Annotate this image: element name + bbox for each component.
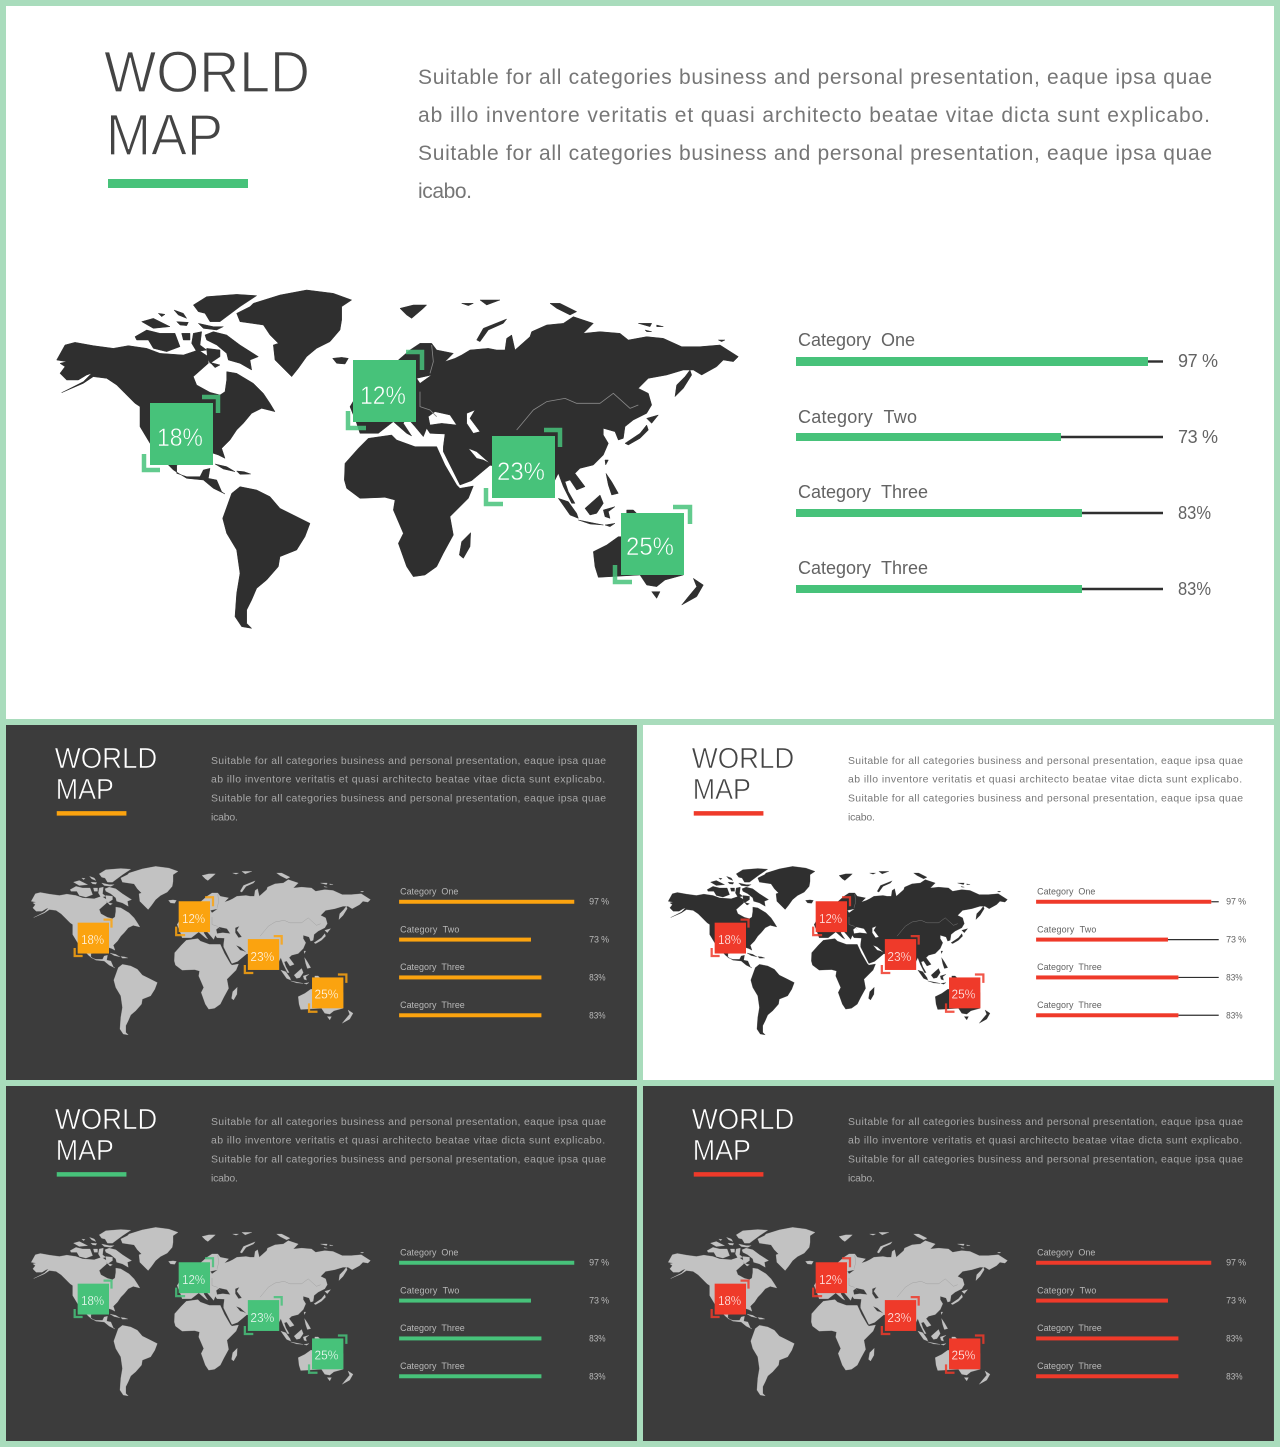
text block: ab illo inventore veritatis et quasi architecto beatae vitae dicta sunt explicabo.: [848, 775, 1242, 786]
world map: [31, 1222, 370, 1396]
category two bar: 73 %: [589, 935, 609, 945]
marker 23%: 23%: [887, 950, 911, 964]
category two bar: Category Two: [1037, 1286, 1096, 1296]
category two bar: [1036, 925, 1246, 945]
category two bar: 73 %: [1226, 935, 1246, 945]
text block: Suitable for all categories business and personal presentation, eaque ipsa quae: [211, 756, 606, 767]
category three bar second: Category Three: [1037, 1000, 1102, 1010]
category three bar second: 83%: [1226, 1010, 1243, 1020]
title underline: [108, 179, 248, 188]
category three bar second: [399, 1000, 606, 1020]
category two bar: Category Two: [400, 925, 459, 935]
text block: Suitable for all categories business and personal presentation, eaque ipsa quae: [848, 1117, 1243, 1128]
marker 18%: 18%: [718, 1294, 741, 1308]
text block: [211, 756, 606, 824]
text block: ab illo inventore veritatis et quasi architecto beatae vitae dicta sunt explicabo.: [418, 104, 1210, 127]
marker 12%: [813, 897, 850, 935]
category three bar second: [399, 1361, 606, 1381]
marker 18%: 18%: [81, 933, 104, 947]
text block: ab illo inventore veritatis et quasi architecto beatae vitae dicta sunt explicabo.: [211, 1136, 605, 1147]
marker 12%: 12%: [182, 912, 205, 926]
marker 18%: 18%: [81, 1294, 104, 1308]
marker 25%: 25%: [952, 1348, 975, 1362]
marker 23%: [245, 936, 282, 973]
category one bar: Category One: [400, 1247, 458, 1257]
text block: Suitable for all categories business and personal presentation, eaque ipsa quae: [848, 1155, 1243, 1166]
category two bar: 73 %: [589, 1296, 609, 1306]
category three bar: Category Three: [1037, 1323, 1102, 1333]
marker 12%: [176, 897, 213, 935]
title: WORLD: [104, 40, 310, 105]
marker 18%: 18%: [157, 424, 203, 452]
category three bar second: Category Three: [400, 1361, 465, 1371]
marker 12%: [813, 1258, 850, 1296]
category one bar: [796, 330, 1218, 371]
text block: ab illo inventore veritatis et quasi architecto beatae vitae dicta sunt explicabo.: [848, 1136, 1242, 1147]
category one bar: 97 %: [589, 1258, 609, 1268]
marker 25%: 25%: [315, 1348, 338, 1362]
title: [55, 743, 157, 806]
category three bar second: 83%: [1178, 579, 1211, 599]
category one bar: Category One: [1037, 1247, 1095, 1257]
text block: [211, 1117, 606, 1185]
title underline: [694, 1172, 763, 1177]
category three bar second: [1036, 1361, 1243, 1381]
marker 23%: [882, 936, 919, 973]
category three bar: Category Three: [798, 482, 928, 502]
text block: icabo.: [848, 1174, 875, 1185]
text block: Suitable for all categories business and personal presentation, eaque ipsa quae: [211, 1155, 606, 1166]
text block: ab illo inventore veritatis et quasi architecto beatae vitae dicta sunt explicabo.: [211, 775, 605, 786]
title underline: [57, 811, 126, 816]
marker 18%: [75, 920, 111, 956]
category three bar: [1036, 962, 1243, 982]
title: WORLD: [55, 1104, 157, 1136]
category three bar: [1036, 1323, 1243, 1343]
category one bar: Category One: [1037, 886, 1095, 896]
marker 25%: [309, 974, 346, 1012]
category three bar second: 83%: [589, 1010, 606, 1020]
category one bar: [1036, 886, 1246, 907]
category three bar: 83%: [589, 1333, 606, 1343]
category three bar: Category Three: [1037, 962, 1102, 972]
category one bar: 97 %: [1178, 351, 1218, 371]
category two bar: [399, 1286, 609, 1306]
panel: dark orange slide: [6, 725, 637, 1080]
marker 23%: 23%: [250, 950, 274, 964]
title: MAP: [56, 1135, 114, 1167]
text block: Suitable for all categories business and personal presentation, eaque ipsa quae: [211, 1117, 606, 1128]
category one bar: [399, 1247, 609, 1268]
marker 18%: [144, 397, 218, 470]
text block: [848, 1117, 1243, 1185]
marker 12%: [176, 1258, 213, 1296]
text block: icabo.: [848, 813, 875, 824]
text block: Suitable for all categories business and personal presentation, eaque ipsa quae: [848, 756, 1243, 767]
marker 12%: [348, 352, 422, 428]
marker 25%: 25%: [952, 987, 975, 1001]
category three bar: 83%: [1226, 1333, 1243, 1343]
marker 12%: 12%: [360, 382, 406, 410]
text block: Suitable for all categories business and personal presentation, eaque ipsa quae: [418, 66, 1212, 89]
title: [55, 1104, 157, 1167]
category three bar second: [1036, 1000, 1243, 1020]
category two bar: Category Two: [798, 407, 917, 427]
category three bar: 83%: [1226, 972, 1243, 982]
marker 12%: 12%: [819, 1273, 842, 1287]
marker 18%: [712, 1281, 748, 1317]
category three bar second: 83%: [589, 1371, 606, 1381]
category three bar second: [796, 558, 1211, 599]
category one bar: [399, 886, 609, 907]
category three bar: [399, 1323, 606, 1343]
category three bar: 83%: [1178, 503, 1211, 523]
title: MAP: [56, 774, 114, 806]
marker 18%: [75, 1281, 111, 1317]
marker 23%: [245, 1297, 282, 1334]
marker 25%: 25%: [315, 987, 338, 1001]
marker 25%: [946, 1335, 983, 1373]
panel: white red slide: [643, 725, 1274, 1080]
title: [104, 40, 310, 168]
panel: dark green slide: [6, 1086, 637, 1441]
category three bar: Category Three: [400, 1323, 465, 1333]
category three bar: Category Three: [400, 962, 465, 972]
title underline: [694, 811, 763, 816]
marker 25%: [946, 974, 983, 1012]
marker 25%: [309, 1335, 346, 1373]
category two bar: Category Two: [1037, 925, 1096, 935]
title: [692, 743, 794, 806]
marker 18%: 18%: [718, 933, 741, 947]
title: WORLD: [55, 743, 157, 775]
title underline: [57, 1172, 126, 1177]
text block: [848, 756, 1243, 824]
category three bar second: Category Three: [1037, 1361, 1102, 1371]
category three bar: 83%: [589, 972, 606, 982]
text block: [418, 66, 1212, 203]
marker 23%: 23%: [250, 1311, 274, 1325]
category one bar: 97 %: [589, 897, 609, 907]
text block: icabo.: [211, 813, 238, 824]
text block: icabo.: [418, 180, 472, 203]
category one bar: [1036, 1247, 1246, 1268]
marker 18%: [712, 920, 748, 956]
marker 23%: 23%: [497, 458, 545, 486]
category three bar second: Category Three: [400, 1000, 465, 1010]
title: MAP: [693, 774, 751, 806]
world map: [57, 280, 738, 628]
panel: dark red slide: [643, 1086, 1274, 1441]
text block: Suitable for all categories business and personal presentation, eaque ipsa quae: [848, 794, 1243, 805]
marker 12%: 12%: [182, 1273, 205, 1287]
category two bar: [1036, 1286, 1246, 1306]
category three bar second: 83%: [1226, 1371, 1243, 1381]
marker 23%: [882, 1297, 919, 1334]
category two bar: Category Two: [400, 1286, 459, 1296]
world map: [668, 861, 1007, 1035]
text block: icabo.: [211, 1174, 238, 1185]
category one bar: 97 %: [1226, 897, 1246, 907]
category two bar: 73 %: [1178, 427, 1218, 447]
category two bar: [796, 407, 1218, 447]
title: MAP: [106, 103, 223, 168]
category two bar: 73 %: [1226, 1296, 1246, 1306]
category one bar: Category One: [798, 330, 915, 350]
title: [692, 1104, 794, 1167]
text block: Suitable for all categories business and personal presentation, eaque ipsa quae: [211, 794, 606, 805]
category one bar: 97 %: [1226, 1258, 1246, 1268]
world map: [668, 1222, 1007, 1396]
category three bar second: Category Three: [798, 558, 928, 578]
marker 23%: 23%: [887, 1311, 911, 1325]
world map: [31, 861, 370, 1035]
title: WORLD: [692, 743, 794, 775]
category two bar: [399, 925, 609, 945]
marker 12%: 12%: [819, 912, 842, 926]
marker 25%: 25%: [626, 533, 674, 561]
marker 23%: [486, 430, 560, 504]
category three bar: [796, 482, 1211, 523]
category one bar: Category One: [400, 886, 458, 896]
marker 25%: [615, 507, 690, 582]
text block: Suitable for all categories business and personal presentation, eaque ipsa quae: [418, 142, 1212, 165]
category three bar: [399, 962, 606, 982]
title: MAP: [693, 1135, 751, 1167]
panel: large white green slide: [6, 6, 1274, 719]
title: WORLD: [692, 1104, 794, 1136]
